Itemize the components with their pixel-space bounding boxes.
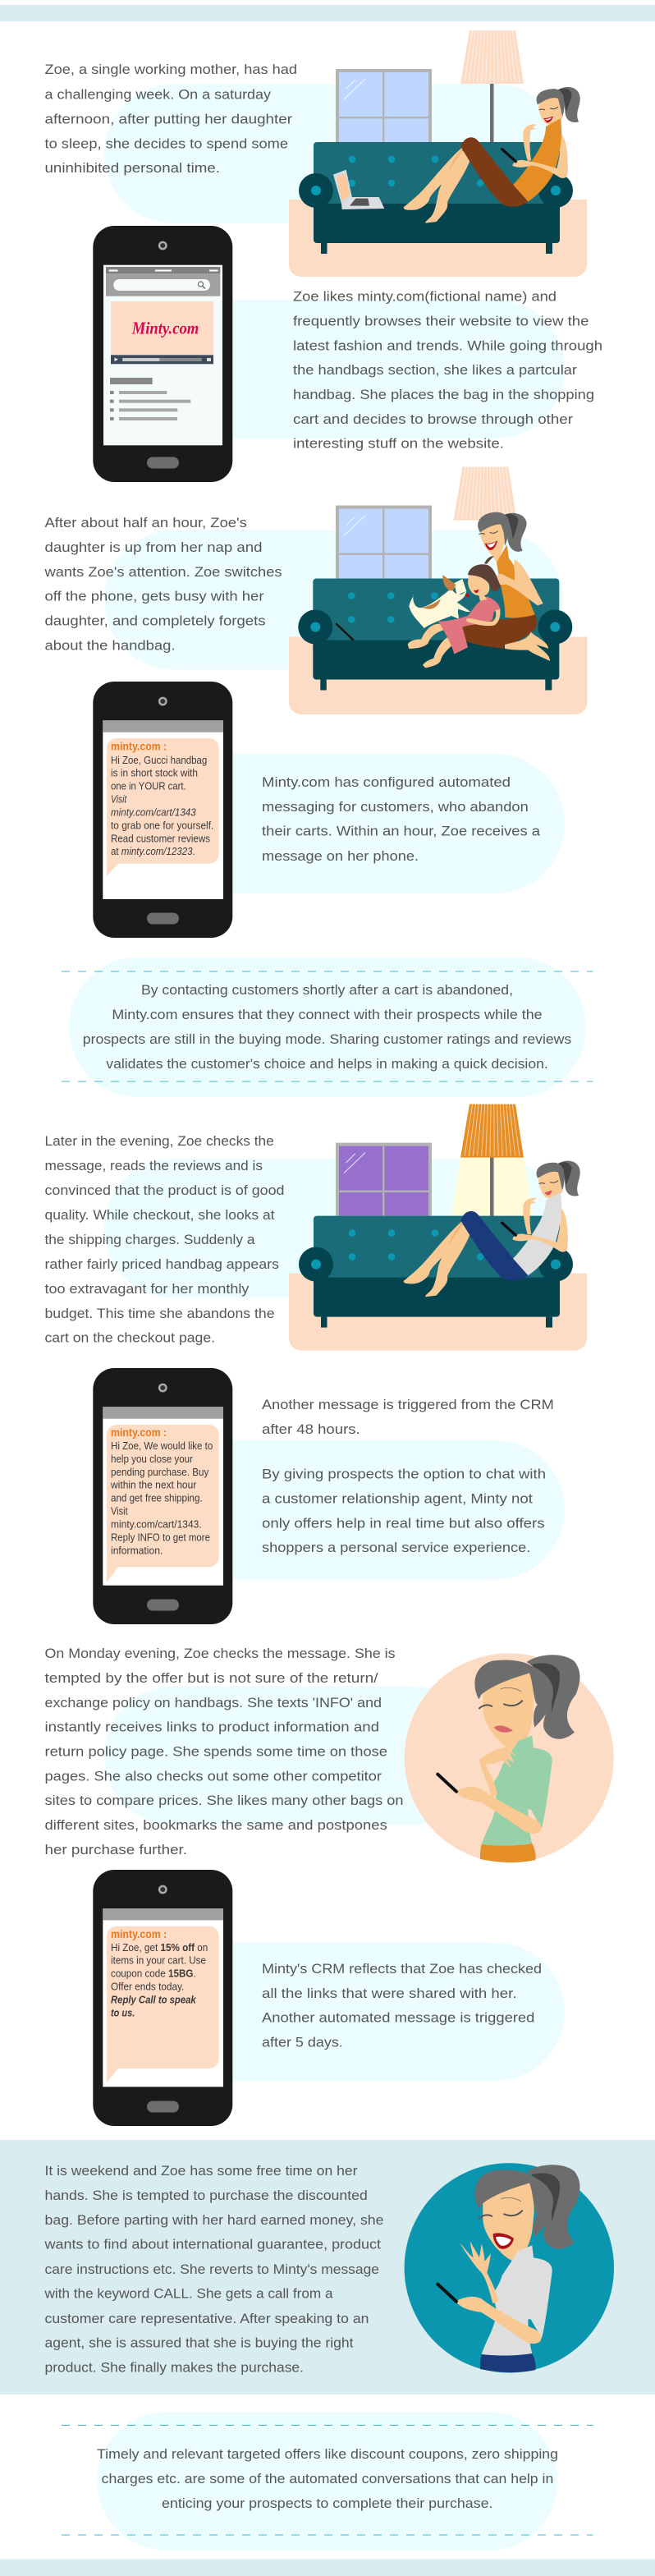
intro text bbox=[44, 62, 297, 176]
checkout text: rather fairly priced handbag appears bbox=[44, 1256, 279, 1272]
window bbox=[336, 506, 432, 578]
background blob 1 bbox=[104, 84, 565, 223]
intro text: a challenging week. On a saturday bbox=[44, 87, 272, 102]
Monday evening text: her purchase further. bbox=[44, 1842, 187, 1857]
phone screen bbox=[103, 1407, 223, 1586]
callout text: prospects are still in the buying mode. Sharing customer ratings and reviews bbox=[83, 1031, 571, 1047]
browsing text: interesting stuff on the website. bbox=[293, 436, 504, 452]
callout 2 bbox=[62, 2412, 593, 2551]
callout text: By contacting customers shortly after a cart is abandoned, bbox=[141, 982, 513, 998]
woman in green top bbox=[437, 1655, 579, 1862]
callout text bbox=[97, 2446, 558, 2511]
message text: Hi Zoe, We would like to bbox=[111, 1440, 213, 1452]
daughter text bbox=[44, 515, 282, 653]
lamp shade bbox=[453, 466, 517, 521]
message bubble bbox=[107, 1926, 219, 2082]
message text: is in short stock with bbox=[111, 768, 198, 779]
agent chat text: By giving prospects the option to chat with bbox=[262, 1467, 546, 1482]
Monday evening text: tempted by the offer but is not sure of the return/ bbox=[44, 1670, 378, 1686]
sofa bbox=[298, 578, 572, 690]
message text: Visit bbox=[111, 1506, 128, 1518]
automated messaging text bbox=[262, 774, 541, 864]
background blob 8 bbox=[205, 1943, 565, 2081]
Monday evening text: pages. She also checks out some other competitor bbox=[44, 1768, 382, 1784]
status bar bbox=[103, 1407, 223, 1419]
phone on sofa bbox=[337, 624, 353, 640]
weekend text: It is weekend and Zoe has some free time on her bbox=[44, 2163, 358, 2179]
intro text: to sleep, she decides to spend some bbox=[44, 136, 288, 151]
message text: to us. bbox=[111, 2007, 135, 2018]
browsing text: Zoe likes minty.com(fictional name) and bbox=[293, 289, 557, 304]
browsing text: latest fashion and trends. While going through bbox=[293, 337, 602, 353]
top band bbox=[0, 5, 655, 21]
lamp glow bbox=[452, 1158, 533, 1216]
message text bbox=[111, 1928, 208, 2018]
status bar bbox=[103, 720, 223, 732]
CRM reflects text: Minty's CRM reflects that Zoe has checked bbox=[262, 1961, 542, 1977]
floor bbox=[289, 637, 588, 714]
peach circle bbox=[405, 1653, 614, 1862]
callout text: charges etc. are some of the automated conversations that can help in bbox=[102, 2471, 553, 2486]
browser bar bbox=[106, 267, 220, 296]
message text: Visit bbox=[111, 794, 127, 806]
CRM reflects text: all the links that were shared with her. bbox=[262, 1986, 517, 2001]
daughter text: daughter is up from her nap and bbox=[44, 540, 263, 555]
message text: minty.com : bbox=[111, 1426, 167, 1439]
phone 4: discount message bbox=[93, 1870, 232, 2126]
message text: one in YOUR cart. bbox=[111, 781, 186, 792]
checkout text bbox=[44, 1133, 284, 1345]
message text: items in your cart. Use bbox=[111, 1955, 206, 1967]
automated messaging text: their carts. Within an hour, Zoe receives a bbox=[262, 824, 541, 839]
Monday evening text: sites to compare prices. She likes many other bags on bbox=[44, 1793, 404, 1808]
floor lamp bbox=[460, 30, 524, 143]
message text bbox=[111, 740, 213, 857]
message text: at minty.com/12323. bbox=[111, 846, 195, 857]
list placeholder bbox=[110, 378, 190, 420]
automated messaging text: message on her phone. bbox=[262, 848, 419, 864]
illustration: Zoe unsure, on peach circle bbox=[405, 1653, 614, 1862]
weekend text: with the keyword CALL. She gets a call from a bbox=[44, 2286, 333, 2302]
video banner bbox=[111, 301, 213, 355]
window bbox=[336, 1143, 432, 1216]
agent chat text: only offers help in real time but also offers bbox=[262, 1515, 545, 1531]
checkout text: Later in the evening, Zoe checks the bbox=[44, 1133, 274, 1149]
floor bbox=[289, 200, 587, 277]
weekend text: hands. She is tempted to purchase the discounted bbox=[44, 2188, 368, 2203]
floor bbox=[289, 1274, 587, 1351]
daughter text: about the handbag. bbox=[44, 637, 176, 653]
message text: minty.com/cart/1343. bbox=[111, 1519, 202, 1531]
phone screen bbox=[103, 720, 223, 899]
background blob 7 bbox=[104, 1687, 482, 1825]
message text: Reply INFO to get more bbox=[111, 1532, 210, 1544]
floor lamp bbox=[460, 1104, 524, 1217]
checkout text: too extravagant for her monthly bbox=[44, 1281, 250, 1297]
background blob 5 bbox=[104, 1159, 565, 1297]
message text: Read customer reviews bbox=[111, 833, 210, 844]
video banner: Minty.com bbox=[131, 319, 199, 338]
window bbox=[336, 69, 432, 142]
message text: Reply Call to speak bbox=[111, 1994, 197, 2005]
phone 3: free shipping message bbox=[93, 1368, 232, 1624]
checkout text: the shipping charges. Suddenly a bbox=[44, 1232, 255, 1247]
Monday evening text: exchange policy on handbags. She texts 'INFO' and bbox=[44, 1695, 382, 1710]
intro text: uninhibited personal time. bbox=[44, 160, 220, 176]
callout text: Timely and relevant targeted offers like discount coupons, zero shipping bbox=[97, 2446, 558, 2462]
message text: to grab one for yourself. bbox=[111, 820, 213, 831]
Monday evening text: On Monday evening, Zoe checks the message. She is bbox=[44, 1646, 396, 1661]
woman lounging, worried bbox=[404, 1161, 580, 1297]
bottom band bbox=[0, 2559, 655, 2576]
Monday evening text: instantly receives links to product information and bbox=[44, 1720, 379, 1735]
browsing text bbox=[293, 289, 602, 452]
background blob 3 bbox=[104, 530, 563, 670]
message text: coupon code 15BG. bbox=[111, 1968, 196, 1980]
browsing text: frequently browses their website to view the bbox=[293, 314, 589, 328]
sofa bbox=[299, 142, 573, 254]
phone 1: Minty website bbox=[93, 226, 232, 482]
checkout text: cart on the checkout page. bbox=[44, 1330, 215, 1345]
callout 1 bbox=[62, 957, 593, 1097]
Monday evening text: return policy page. She spends some time on those bbox=[44, 1744, 387, 1759]
laptop bbox=[333, 170, 384, 209]
callout text bbox=[83, 982, 571, 1072]
intro text: afternoon, after putting her daughter bbox=[44, 112, 292, 126]
message text: pending purchase. Buy bbox=[111, 1467, 209, 1478]
CRM trigger text bbox=[262, 1397, 554, 1437]
phone 2: short stock message bbox=[93, 682, 232, 938]
agent chat text: shoppers a personal service experience. bbox=[262, 1540, 530, 1555]
checkout text: message, reads the reviews and is bbox=[44, 1158, 263, 1173]
scene 3: Zoe at night, thinking bbox=[104, 1104, 587, 1351]
daughter text: wants Zoe's attention. Zoe switches bbox=[44, 564, 282, 580]
background blob 6 bbox=[205, 1440, 565, 1579]
checkout text: budget. This time she abandons the bbox=[44, 1306, 274, 1321]
phone screen bbox=[103, 265, 222, 445]
panel background bbox=[0, 2140, 655, 2395]
message text: information. bbox=[111, 1545, 163, 1556]
message bubble bbox=[107, 1425, 219, 1582]
automated messaging text: messaging for customers, who abandon bbox=[262, 799, 529, 815]
background blob 4 bbox=[205, 754, 565, 893]
browsing text: the handbags section, she likes a partcular bbox=[293, 362, 577, 378]
weekend text: wants to find about international guarantee, product bbox=[44, 2237, 381, 2252]
weekend text: product. She finally makes the purchase. bbox=[44, 2360, 304, 2376]
weekend text: care instructions etc. She reverts to Minty's message bbox=[44, 2261, 379, 2277]
message text: minty.com : bbox=[111, 1928, 167, 1940]
daughter text: After about half an hour, Zoe's bbox=[44, 515, 247, 530]
agent chat text bbox=[262, 1467, 546, 1555]
weekend text: bag. Before parting with her hard earned money, she bbox=[44, 2212, 384, 2228]
checkout text: convinced that the product is of good bbox=[44, 1182, 284, 1198]
panel: weekend purchase bbox=[0, 2140, 655, 2395]
message text: help you close your bbox=[111, 1453, 193, 1465]
message text: minty.com : bbox=[111, 740, 167, 752]
message text: Hi Zoe, get 15% off on bbox=[111, 1942, 208, 1954]
weekend text: agent, she is assured that she is buying the right bbox=[44, 2335, 354, 2351]
message text bbox=[110, 1426, 213, 1556]
CRM reflects text: Another automated message is triggered bbox=[262, 2010, 534, 2026]
message text: Hi Zoe, Gucci handbag bbox=[111, 755, 207, 766]
teal circle bbox=[405, 2163, 614, 2373]
callout background bbox=[98, 2412, 557, 2551]
callout background bbox=[69, 957, 586, 1097]
child bbox=[408, 556, 501, 668]
weekend text: customer care representative. After speaking to an bbox=[44, 2311, 369, 2326]
scene 1: Zoe relaxing on the sofa bbox=[104, 30, 587, 277]
callout text: validates the customer's choice and helps in making a quick decision. bbox=[106, 1056, 548, 1072]
message text: and get free shipping. bbox=[111, 1493, 203, 1504]
Monday evening text bbox=[44, 1646, 404, 1857]
CRM reflects text: after 5 days. bbox=[262, 2035, 343, 2050]
checkout text: quality. While checkout, she looks at bbox=[44, 1207, 275, 1223]
CRM trigger text: Another message is triggered from the CRM bbox=[262, 1397, 554, 1412]
message bubble bbox=[107, 738, 219, 876]
dog bbox=[409, 575, 470, 628]
mother and child bbox=[408, 512, 550, 668]
video controls bbox=[111, 355, 213, 364]
CRM reflects text bbox=[262, 1961, 542, 2050]
callout text: Minty.com ensures that they connect with their prospects while the bbox=[112, 1007, 543, 1022]
message text: minty.com/cart/1343 bbox=[111, 806, 196, 818]
agent chat text: a customer relationship agent, Minty not bbox=[262, 1491, 533, 1506]
scene 2: Zoe with daughter and dog bbox=[104, 466, 588, 714]
phone screen bbox=[103, 1908, 223, 2087]
Monday evening text: different sites, bookmarks the same and postpones bbox=[44, 1817, 387, 1833]
CRM trigger text: after 48 hours. bbox=[262, 1421, 360, 1437]
message text: Offer ends today. bbox=[111, 1981, 184, 1993]
browsing text: handbag. She places the bag in the shopping bbox=[293, 387, 594, 402]
background blob 2 bbox=[205, 300, 565, 439]
weekend text bbox=[44, 2163, 383, 2376]
daughter text: off the phone, gets busy with her bbox=[44, 589, 264, 604]
woman lounging with phone bbox=[404, 87, 580, 223]
message text: within the next hour bbox=[110, 1480, 196, 1491]
callout text: enticing your prospects to complete their purchase. bbox=[162, 2496, 492, 2511]
browsing text: cart and decides to browse through other bbox=[293, 411, 573, 427]
status bar bbox=[103, 1908, 223, 1920]
daughter text: daughter, and completely forgets bbox=[44, 613, 266, 629]
intro text: Zoe, a single working mother, has had bbox=[44, 62, 297, 77]
woman waving, happy bbox=[437, 2165, 579, 2372]
automated messaging text: Minty.com has configured automated bbox=[262, 774, 511, 790]
sofa bbox=[299, 1216, 573, 1328]
